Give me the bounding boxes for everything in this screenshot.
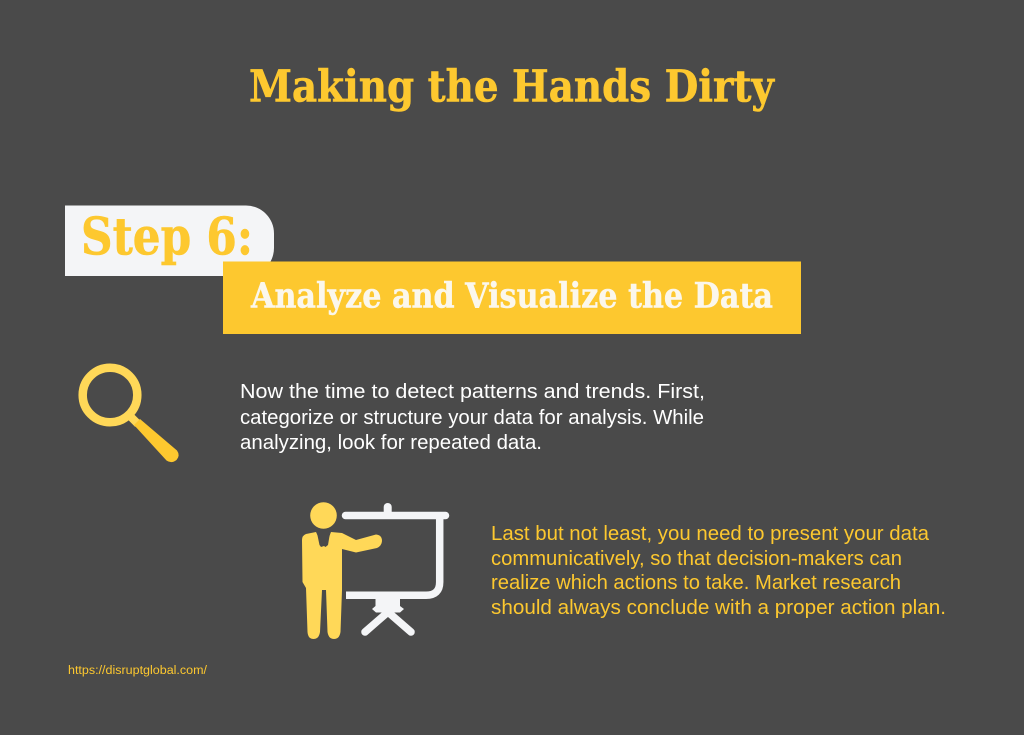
text block: detect patterns: Now the time to detect patterns and trends. First, [240, 381, 705, 403]
text block: present data: Last but not least, you need to present your data [491, 523, 930, 545]
title: Making the Hands Dirty [249, 62, 775, 112]
step label: Step 6: [81, 208, 253, 268]
text block: present data: realize which actions to take. Market research [491, 572, 901, 594]
presentation board [346, 507, 446, 632]
source url: https://disruptglobal.com/ [68, 665, 208, 677]
text block: present data: communicatively, so that decision-makers can [491, 548, 902, 570]
badge background [65, 206, 274, 276]
presenter figure [302, 502, 382, 639]
banner background [223, 262, 801, 334]
icon: magnifying glass [83, 368, 179, 462]
banner heading: Analyze and Visualize the Data [250, 276, 773, 316]
step heading banner [223, 262, 801, 334]
text block: detect patterns: analyzing, look for repeated data. [240, 432, 542, 454]
icon: presenter at board [302, 502, 446, 639]
text block: detect patterns: categorize or structure your data for analysis. While [240, 407, 704, 429]
necktie [317, 533, 330, 547]
step badge [65, 206, 274, 276]
text block: present data: should always conclude with a proper action plan. [491, 597, 946, 619]
